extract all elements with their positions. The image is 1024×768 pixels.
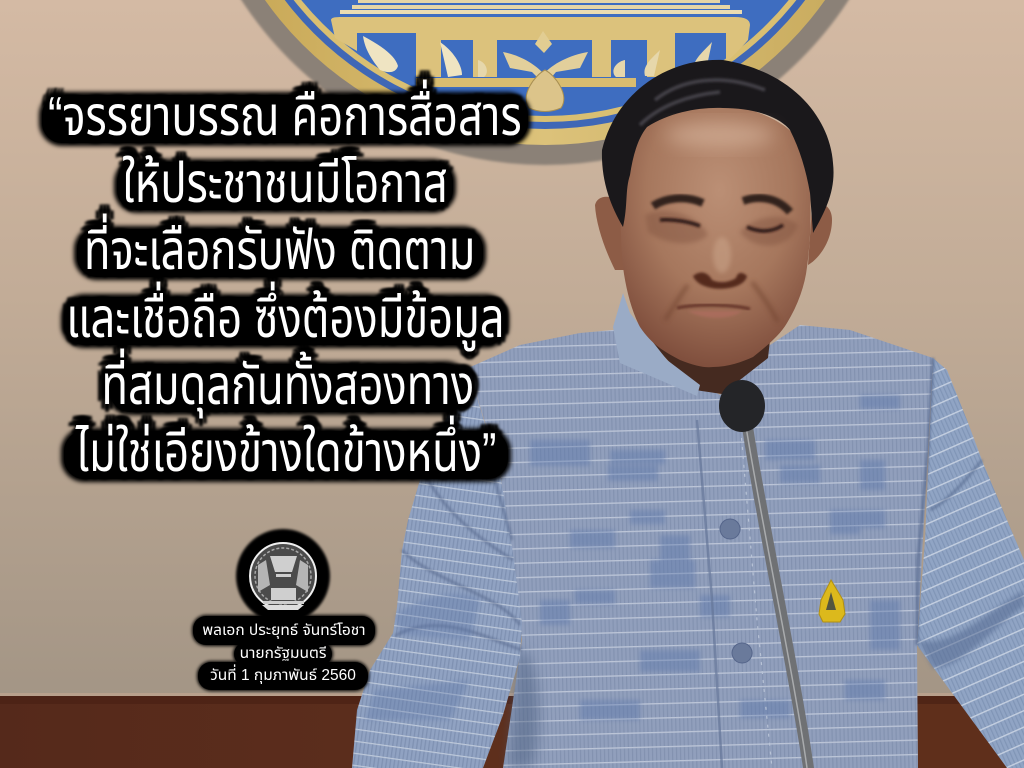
quote line 4: และเชื่อถือ ซึ่งต้องมีข้อมูล (66, 287, 504, 349)
quote line 1: “จรรยาบรรณ คือการสื่อสาร (48, 85, 522, 147)
person: collar and neck (613, 293, 770, 396)
person: suit torso (468, 325, 933, 768)
person: left sleeve (352, 368, 522, 768)
attribution date: วันที่ 1 กุมภาพันธ์ 2560 (210, 667, 356, 684)
person: head (595, 60, 834, 367)
quote line 5: ที่สมดุลกันทั้งสองทาง (102, 354, 474, 416)
icon: gold pin badge (819, 580, 845, 622)
person: right sleeve (917, 358, 1024, 768)
quote line 6: ไม่ใช่เอียงข้างใดข้างหนึ่ง” (76, 421, 496, 483)
quote line 3: ที่จะเลือกรับฟัง ติดตาม (84, 219, 476, 281)
attribution name: พลเอก ประยุทธ์ จันทร์โอชา (202, 622, 366, 638)
attribution title (234, 642, 332, 666)
small seal emblem (236, 529, 330, 623)
attribution name (193, 616, 375, 645)
seal emblem on wall (183, 0, 907, 165)
attribution title: นายกรัฐมนตรี (240, 645, 326, 662)
quote line 2: ให้ประชาชนมีโอกาส (122, 152, 448, 214)
wood panel (0, 693, 1024, 768)
attribution date (198, 662, 368, 690)
microphone (719, 380, 814, 768)
